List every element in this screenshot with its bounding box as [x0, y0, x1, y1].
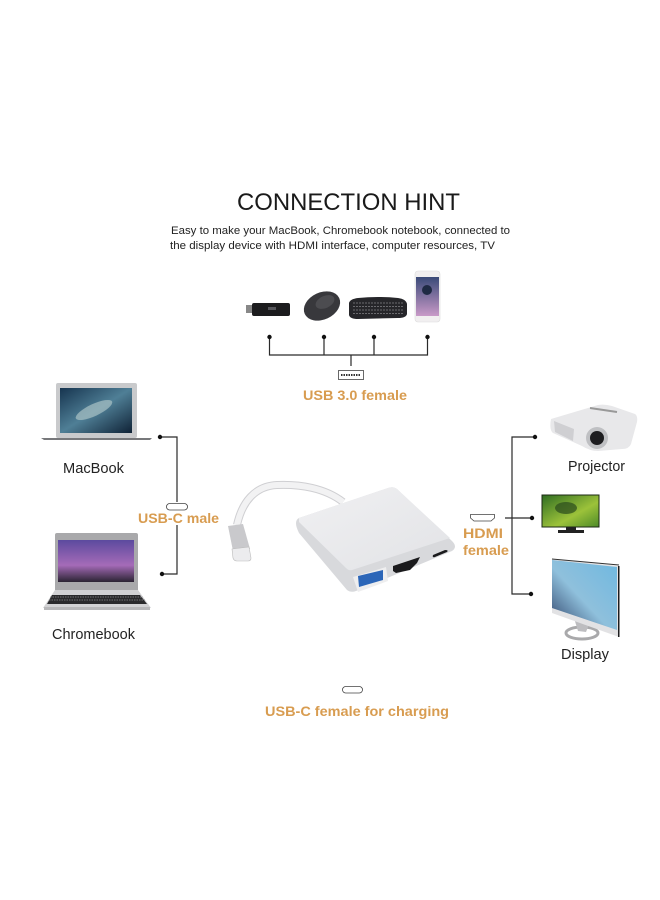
- HDMI port: [393, 557, 420, 573]
- label: HDMI female: HDMI: [463, 525, 503, 541]
- USB port: [353, 567, 388, 592]
- icon: USB stick: [246, 303, 290, 316]
- adapter body: [296, 487, 455, 592]
- icon: phone: [415, 271, 440, 322]
- HDMI connector lines: [505, 435, 537, 596]
- USB-C plug: [228, 524, 251, 561]
- icon: keyboard: [349, 297, 407, 319]
- icon: mouse: [299, 286, 345, 326]
- title: CONNECTION HINT: [237, 189, 460, 216]
- icon: HDMI port: [470, 514, 494, 521]
- cable: [237, 485, 343, 525]
- label: Chromebook: Chromebook: [52, 626, 135, 643]
- label: HDMI female: [463, 525, 509, 558]
- label: Display: Display: [561, 646, 609, 663]
- label: USB-C female for charging: USB-C female for charging: [265, 703, 449, 719]
- panel: HDMI outputs: [463, 405, 637, 663]
- label: USB-C male: USB-C male: [138, 510, 219, 526]
- intro text: Easy to make your MacBook, Chromebook notebook, connected to: [171, 225, 510, 237]
- label: Projector: Projector: [568, 458, 625, 475]
- intro text: [170, 225, 510, 252]
- icon: TV: [542, 495, 599, 533]
- USB-C connector lines: [158, 435, 177, 576]
- panel: USB-C charging: [265, 686, 449, 719]
- icon: USB-C plug: [166, 504, 188, 510]
- label: MacBook: MacBook: [63, 460, 124, 477]
- icon: USB-C port: [342, 686, 362, 693]
- icon: Chromebook laptop: [43, 533, 151, 610]
- panel: USB-C sources: [41, 383, 219, 643]
- icon: projector: [550, 405, 637, 451]
- panel: USB 3.0 devices: [246, 271, 440, 403]
- adapter: [228, 485, 455, 592]
- label: USB 3.0 female: USB 3.0 female: [303, 387, 407, 403]
- USB-C port: [433, 550, 448, 557]
- icon: display monitor: [552, 559, 620, 639]
- label: HDMI female: female: [463, 542, 509, 558]
- icon: MacBook laptop: [41, 383, 152, 440]
- intro text: the display device with HDMI interface, computer resources, TV: [170, 240, 496, 252]
- USB connector lines: [267, 335, 430, 366]
- icon: USB port: [338, 370, 364, 380]
